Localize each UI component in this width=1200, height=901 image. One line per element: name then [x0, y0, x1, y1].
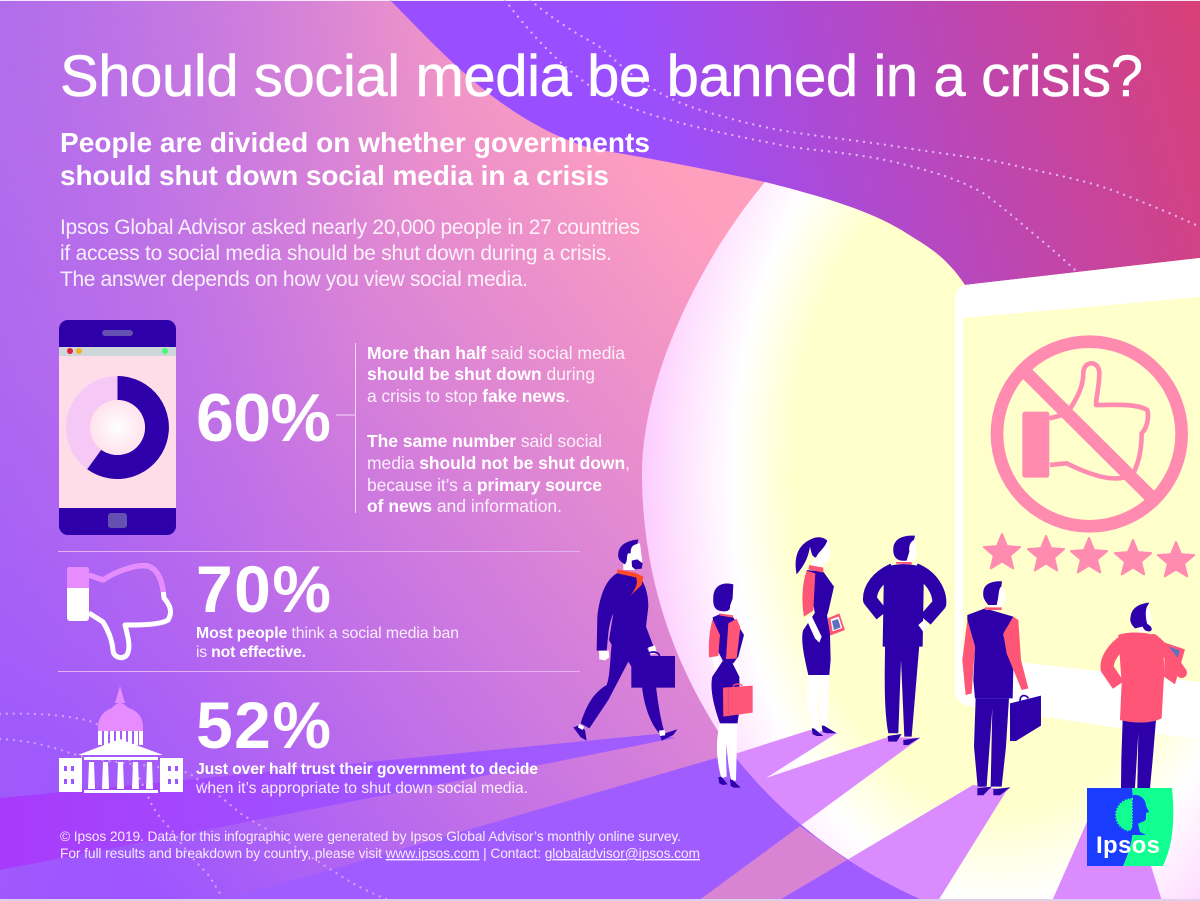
donut chart: 60% [66, 376, 169, 479]
footer credits: For full results and breakdown by country, please visit www.ipsos.com | Contact: globaladvisor@ipsos.com [60, 846, 700, 861]
intro text [60, 216, 640, 291]
text: stop fake news: More than half said social media [367, 343, 625, 363]
text: primary source of news: The same number said social [367, 431, 602, 451]
text: stop fake news: a crisis to stop fake news. [367, 386, 570, 406]
icon: smartphone with donut chart [59, 320, 176, 535]
icon: five stars [984, 534, 1194, 576]
floor shadow: purple floor area [222, 730, 1000, 901]
icon: government building [59, 686, 183, 793]
logo wordmark: Ipsos [1096, 832, 1160, 859]
subtitle [60, 127, 650, 191]
text: primary source of news: because it’s a primary source [367, 475, 602, 495]
figure: man from behind, hands on hips [870, 536, 939, 745]
figure: woman with tablet [796, 537, 845, 736]
floor shadow: walking man [0, 734, 675, 870]
text: ban not effective: is not effective. [196, 644, 306, 661]
divider lines [58, 552, 580, 672]
tablet wall frame [955, 258, 1200, 740]
stat: 52%: 52% [196, 688, 331, 762]
floor light band on purple [698, 826, 847, 901]
intro text: The answer depends on how you view social media. [60, 268, 528, 291]
dotted lines bottom left [0, 714, 389, 900]
text: primary source of news: media should not be shut down, [367, 453, 630, 473]
subtitle: should shut down social media in a crisis [60, 160, 609, 191]
figure: man in vest with briefcase [962, 581, 1041, 795]
logo: Ipsos [1087, 788, 1173, 866]
text: primary source of news: of news and information. [367, 496, 562, 516]
icon: thumbs down [67, 566, 171, 658]
intro text: Ipsos Global Advisor asked nearly 20,000 people in 27 countries [60, 216, 640, 239]
icon: banned thumbs up [997, 342, 1182, 526]
floor shadows in the light [700, 730, 1162, 901]
figure: woman with red case [709, 583, 753, 788]
bracket connector [336, 343, 356, 513]
tablet wall screen [963, 297, 1200, 682]
logo tree silhouette [1116, 795, 1149, 835]
text: ban not effective [196, 625, 459, 661]
text: stop fake news: should be shut down during [367, 364, 595, 384]
figure: walking man with briefcase [573, 539, 677, 741]
text: ban not effective: Most people think a social media ban [196, 625, 459, 642]
footer credits: © Ipsos 2019. Data for this infographic were generated by Ipsos Global Advisor’s monthly online survey. [60, 829, 681, 844]
text: primary source of news [367, 431, 630, 516]
intro text: if access to social media should be shut down during a crisis. [60, 242, 612, 265]
bottom edge [0, 899, 1200, 901]
text: trust government: when it’s appropriate to shut down social media. [195, 780, 528, 797]
dotted lines top [505, 0, 1200, 270]
footer credits [60, 829, 700, 861]
top right swoosh [390, 0, 1200, 285]
subtitle: People are divided on whether governments [60, 127, 650, 158]
text: trust government: Just over half trust their government to decide [196, 761, 538, 778]
text: stop fake news [367, 343, 625, 406]
stat: 60%: 60% [196, 380, 331, 456]
light beam [642, 182, 1200, 901]
figure: man in red sweater with tablet [1107, 603, 1185, 788]
title: Should social media be banned in a crisis? [60, 44, 1143, 109]
text: trust government [195, 761, 538, 797]
stat: 70%: 70% [196, 552, 331, 626]
